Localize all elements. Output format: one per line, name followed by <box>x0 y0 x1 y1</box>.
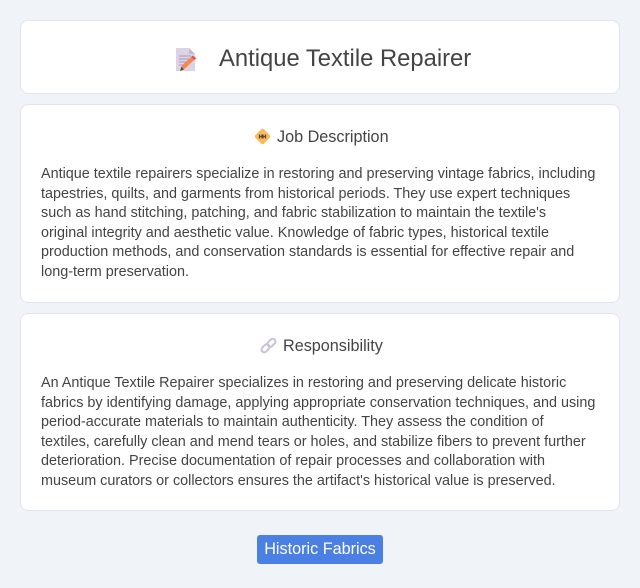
text block: responsibility <box>41 375 595 488</box>
title: Antique Textile Repairer <box>219 45 471 72</box>
text block: responsibility: period-accurate materials to maintain authenticity. They assess the condition of <box>41 414 544 430</box>
text block: job description: original integrity and aesthetic value. Knowledge of fabric types, historical textile <box>41 224 549 240</box>
text block: responsibility: deterioration. Precise documentation of repair processes and collaboration with <box>41 453 545 469</box>
icon: document with pencil <box>176 48 196 71</box>
icon: orange diamond sign <box>254 128 270 144</box>
panel: title card <box>20 20 620 94</box>
heading: job description: Job Description <box>277 128 389 146</box>
text block: job description: such as hand stitching, patching, and fabric stabilization to maintain the textile's <box>41 205 546 221</box>
tag button: historic fabrics: Historic Fabrics <box>264 540 376 558</box>
text block: responsibility: An Antique Textile Repairer specializes in restoring and preserving delicate historic <box>41 375 566 391</box>
panel: responsibility <box>20 313 620 511</box>
panel: job description <box>20 104 620 303</box>
text block: responsibility: textiles, carefully clean and mend tears or holes, and stabilize fibers to prevent further <box>41 434 586 450</box>
text block: responsibility: museum curators or collectors ensures the artifact's historical value is preserved. <box>41 472 556 488</box>
text block: job description: production methods, and conservation standards is essential for effective repair and <box>41 244 574 260</box>
text block: job description: long-term preservation. <box>41 264 189 280</box>
text block: job description: Antique textile repairers specialize in restoring and preserving vintage fabrics, including <box>41 166 595 182</box>
text block: responsibility: fabrics by identifying damage, applying appropriate conservation techniques, and using <box>41 394 595 410</box>
icon: chain link <box>260 338 276 354</box>
text block: job description <box>41 166 595 280</box>
text block: job description: tapestries, quilts, and garments from historical periods. They use expert techniques <box>41 186 570 202</box>
heading: responsibility: Responsibility <box>283 337 383 355</box>
tag button: historic fabrics <box>257 535 383 564</box>
